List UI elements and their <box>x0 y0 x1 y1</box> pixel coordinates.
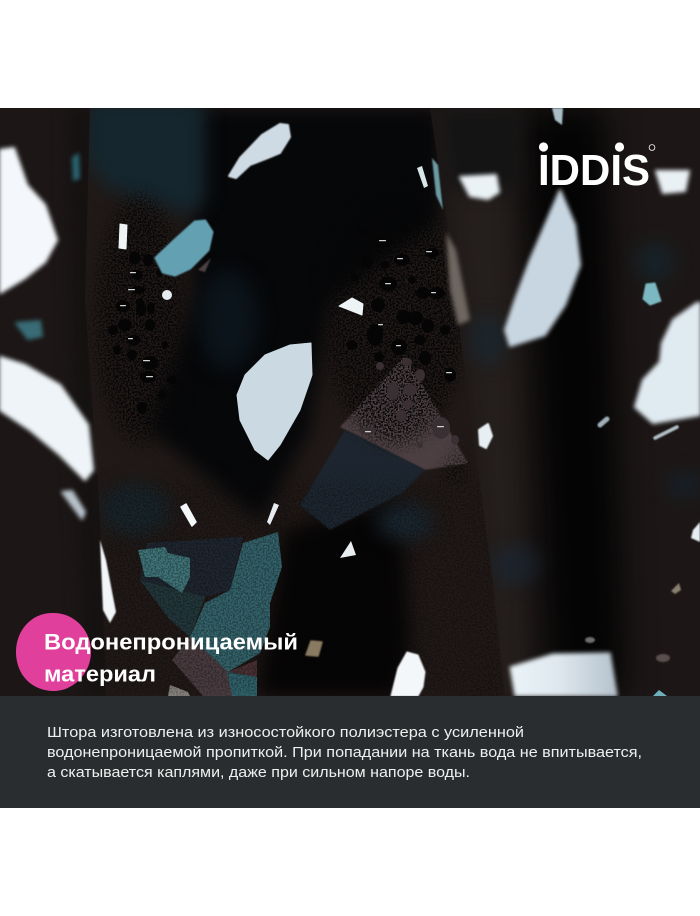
heading: материал <box>44 662 156 686</box>
background fabric folds <box>70 108 700 696</box>
logo: iddis: IDDIS <box>538 146 650 195</box>
description text: а скатывается каплями, даже при сильном напоре воды. <box>47 764 470 781</box>
description text: Штора изготовлена из износостойкого полиэстера с усиленной <box>47 724 524 741</box>
pink circle accent <box>16 613 91 691</box>
heading <box>44 630 298 686</box>
camouflage teal pattern <box>138 532 282 696</box>
description panel <box>0 696 700 808</box>
heading: Водонепроницаемый <box>44 630 298 654</box>
centre panel of curtain <box>80 100 520 696</box>
water droplets: fine speckle <box>90 190 502 696</box>
photo: shower curtain fabric <box>0 100 700 696</box>
terrazzo chips <box>0 108 700 696</box>
description text: водонепроницаемой пропиткой. При попадании на ткань вода не впитывается, <box>47 744 642 761</box>
water droplets: large <box>108 226 459 448</box>
description text <box>47 724 642 781</box>
